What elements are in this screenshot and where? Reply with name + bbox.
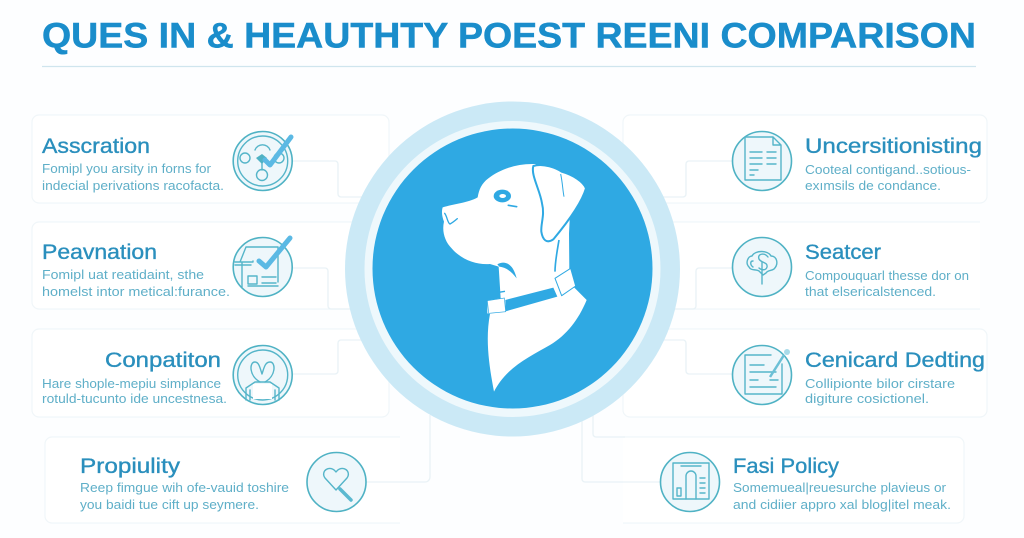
icon: form and check <box>233 238 292 296</box>
central circle with dog <box>345 102 680 436</box>
text block: Peavnation description: homelst intor metical:furance. <box>42 285 230 299</box>
heading: Conpatiton: Conpatiton <box>105 349 221 372</box>
text block: Uncersitionisting description: Cooteal contigand..sotious- <box>805 163 971 177</box>
text block: Propiulity description: you baidi tue cift up seymere. <box>80 498 259 512</box>
text block: Asscration description: Fomipl you arsity in forns for <box>42 162 211 176</box>
icon: note and pen <box>732 346 792 404</box>
icon: building chart <box>660 452 720 512</box>
heading: Propiulity: Propiulity <box>80 455 181 478</box>
text block: Asscration description: indecial perivations racofacta. <box>42 179 224 193</box>
panel: Uncersitionisting <box>623 115 987 203</box>
text block: Cenicard Dedting description: digiture cosictionel. <box>805 392 929 406</box>
text block: Fasi Policy description: and cidiier appro xal blog|itel meak. <box>733 498 951 512</box>
text block: Peavnation description: Fomipl uat reatidaint, sthe <box>42 268 204 282</box>
text block: Conpatiton description <box>42 377 227 406</box>
outer ring <box>345 102 680 436</box>
panel: Peavnation <box>32 222 389 309</box>
text block: Cenicard Dedting description <box>805 377 955 406</box>
text block: Conpatiton description: Hare shople-mepiu simplance <box>42 377 221 391</box>
heading: Uncersitionisting: Uncersitionisting <box>805 135 982 158</box>
text block: Conpatiton description: rotuld-tucunto ide uncestnesa. <box>42 392 227 406</box>
icon: people and check <box>233 132 292 190</box>
text block: Uncersitionisting description: exımsils de condance. <box>805 179 941 193</box>
text block: Fasi Policy description <box>733 481 951 512</box>
text block: Peavnation description <box>42 268 230 299</box>
text block: Seatcer description: Compouquarl thesse dor on <box>805 269 969 283</box>
panel: Propiulity <box>45 437 400 523</box>
heading: Peavnation: Peavnation <box>42 241 157 264</box>
panel: Asscration <box>32 115 389 203</box>
heading: Cenicard Dedting: Cenicard Dedting <box>805 349 985 372</box>
panel: Seatcer <box>623 222 980 309</box>
text block: Seatcer description <box>805 269 969 299</box>
text block: Propiulity description: Reep fimgue wih ofe-vauid toshire <box>80 481 289 495</box>
text block: Cenicard Dedting description: Collipionte bilor cirstare <box>805 377 955 391</box>
icon: person in rings <box>233 346 292 404</box>
title: QUES IN & HEAUTHTY POEST REENI COMPARISON <box>42 16 976 56</box>
connector lines <box>293 161 732 482</box>
icon: document <box>732 132 792 190</box>
text block: Asscration description <box>42 162 224 193</box>
heading: Fasi Policy: Fasi Policy <box>733 455 840 478</box>
text block: Seatcer description: that elsericalstenced. <box>805 285 936 299</box>
panel: Fasi Policy <box>623 437 964 523</box>
panel: Conpatiton <box>32 329 389 417</box>
heading: Asscration: Asscration <box>42 135 150 158</box>
text block: Propiulity description <box>80 481 289 512</box>
icon: dog head <box>442 164 587 392</box>
icon: heart magnifier <box>307 452 366 512</box>
heading: Seatcer: Seatcer <box>805 241 881 264</box>
panel: Cenicard Dedting <box>623 329 987 417</box>
text block: Fasi Policy description: Somemueal|reuesurche plavieus or <box>733 481 946 495</box>
icon: search leaf <box>732 238 792 296</box>
text block: Uncersitionisting description <box>805 163 971 193</box>
